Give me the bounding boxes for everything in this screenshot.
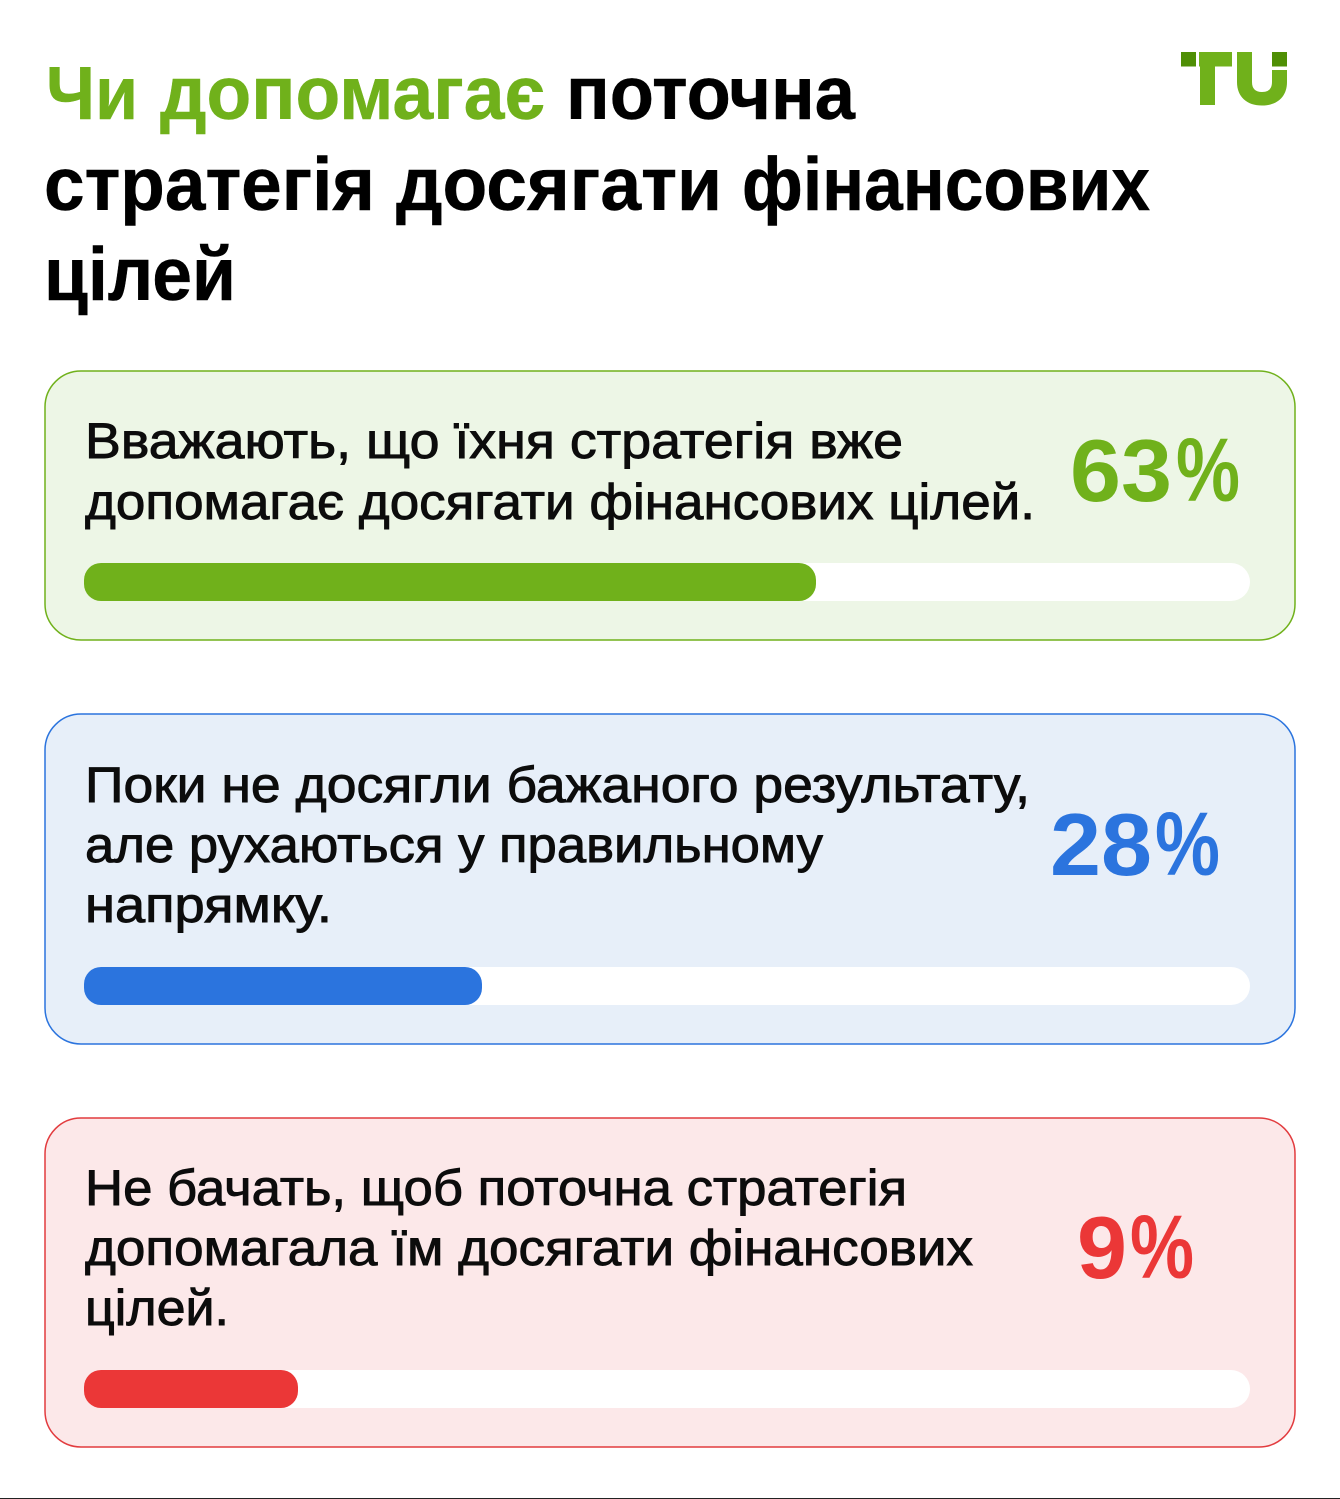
- title: фінансових: [742, 142, 1150, 226]
- panel: 28%: [45, 714, 1295, 1044]
- logo: [1181, 52, 1287, 106]
- title: допомагає: [160, 51, 545, 135]
- text: 9% description: Не бачать, щоб поточна стратегія: [85, 1160, 907, 1216]
- title: досягати: [396, 142, 722, 226]
- text: 9% description: цілей.: [85, 1280, 229, 1336]
- title: Чи: [46, 51, 138, 135]
- value: 28%: %: [1155, 795, 1220, 895]
- title: стратегія: [44, 142, 375, 226]
- panel: 9%: [45, 1118, 1295, 1447]
- progress bar: 63%: [84, 563, 1250, 601]
- panel: 63%: [45, 371, 1295, 640]
- value: 63%: 63: [1070, 421, 1172, 520]
- text: 9% description: допомагала їм досягати фінансових: [85, 1220, 973, 1276]
- title: [44, 51, 1150, 316]
- value: 9%: 9: [1077, 1198, 1127, 1297]
- text: 63% description: допомагає досягати фінансових цілей.: [85, 474, 1035, 530]
- text: 28% description: напрямку.: [85, 877, 332, 933]
- text: 63% description: Вважають, що їхня стратегія вже: [85, 413, 903, 469]
- text: 63% description: [85, 413, 1035, 530]
- value: 63%: %: [1176, 421, 1240, 521]
- value: 28%: 28: [1050, 795, 1152, 894]
- text: 28% description: [85, 757, 1030, 933]
- text: 28% description: але рухаються у правильному: [85, 817, 823, 873]
- progress bar: 28%: [84, 967, 1250, 1005]
- text: 9% description: [85, 1160, 973, 1336]
- value: 28%: [1050, 795, 1220, 895]
- value: 9%: %: [1130, 1198, 1194, 1298]
- progress bar: 9%: [84, 1370, 1250, 1408]
- title: цілей: [44, 232, 236, 316]
- text: 28% description: Поки не досягли бажаного результату,: [85, 757, 1030, 813]
- title: поточна: [566, 51, 856, 135]
- value: 63%: [1070, 421, 1240, 521]
- value: 9%: [1077, 1198, 1194, 1298]
